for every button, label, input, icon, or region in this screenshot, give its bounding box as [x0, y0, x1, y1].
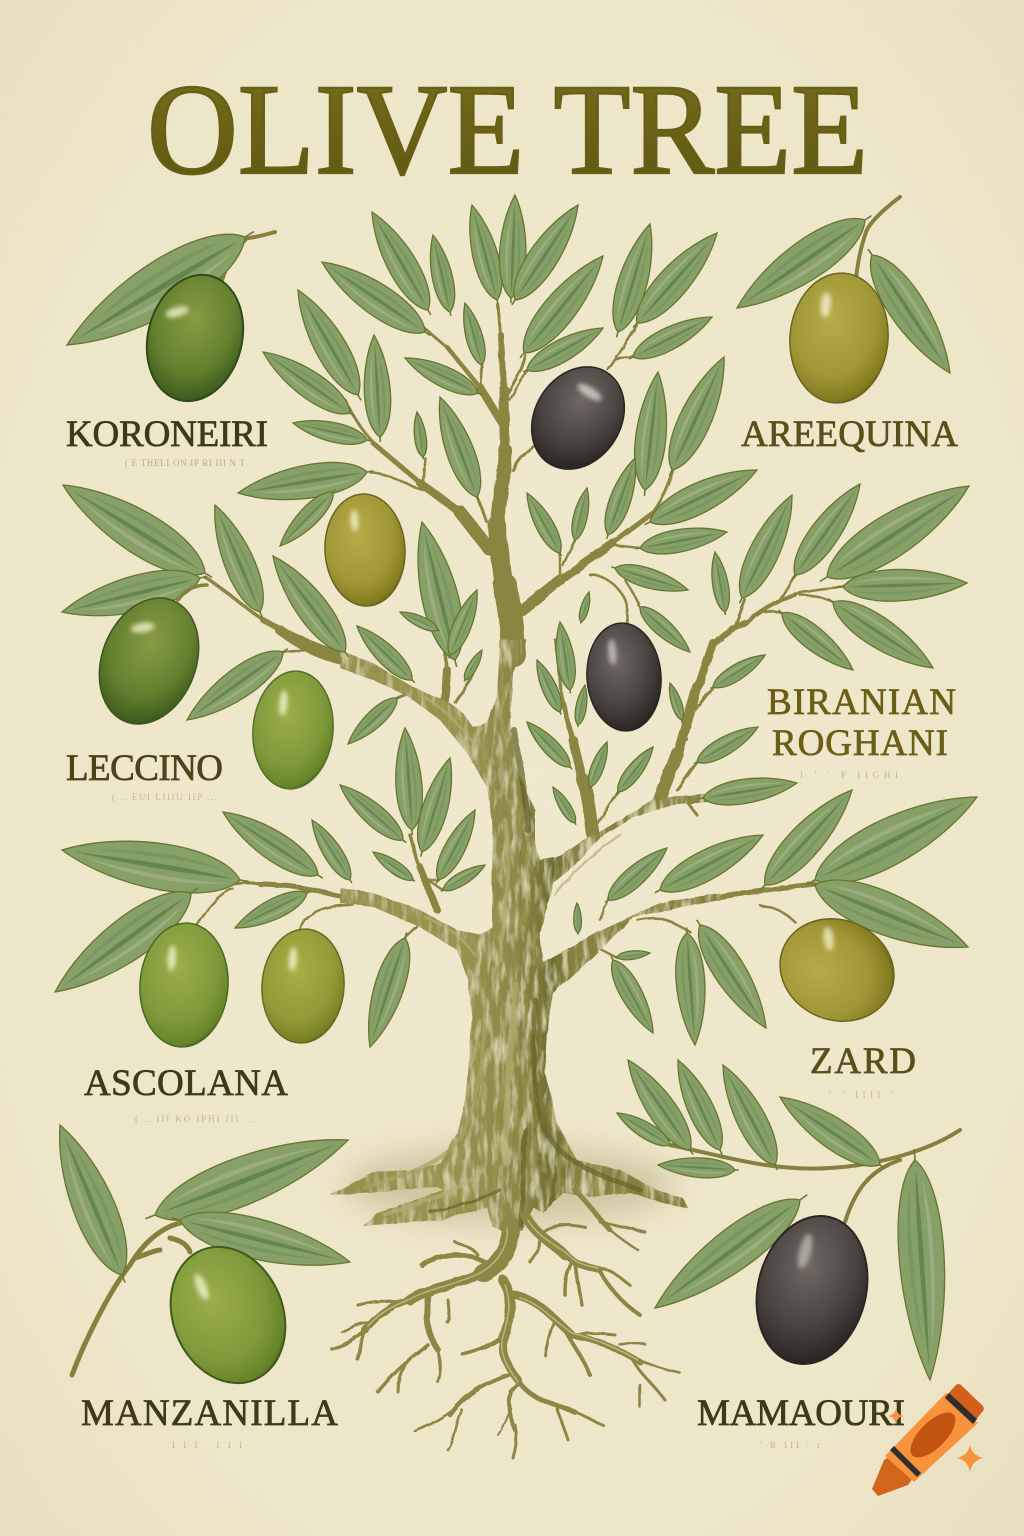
olive: middle green: [248, 668, 338, 792]
leaves: upper left: [235, 282, 492, 553]
areequina olive: [785, 269, 893, 407]
root highlights: [368, 1220, 638, 1382]
olive: right dark: [583, 621, 665, 733]
mamaouri label: MAMAOURI: [697, 1393, 905, 1434]
biranian label: [767, 682, 956, 764]
panel: Manzanilla: [41, 1117, 357, 1450]
olive tree: [42, 194, 988, 1458]
areequina label: AREEQUINA: [741, 414, 958, 455]
panel: Areequina: [726, 197, 965, 455]
mamaouri olive: [741, 1204, 883, 1376]
leaves: top crown: [313, 194, 728, 404]
sparkle small: [888, 1408, 904, 1424]
koroneiri olive: [134, 265, 256, 411]
ground shadow under tree: [345, 1147, 675, 1223]
biranian label: ROGHANI: [772, 723, 948, 764]
second ascolana olive: [258, 926, 348, 1046]
leaves: lower right: [573, 776, 988, 1046]
manzanilla sprig: [41, 1117, 357, 1375]
panel: Zard: [764, 902, 916, 1100]
underground roots: [332, 1190, 680, 1458]
title: OLIVE TREE: [147, 58, 868, 202]
zard label: ZARD: [810, 1041, 916, 1082]
biranian caption: I ' ' P IIGHI: [800, 770, 898, 780]
koroneiri caption: ( E THELI ON IP RI III N T: [125, 458, 246, 468]
panel: Mamaouri: [613, 1052, 960, 1450]
panel: Leccino: [66, 583, 223, 802]
bark lines: [365, 697, 640, 1225]
zard caption: " ' IIII ': [828, 1090, 893, 1100]
leaves: upper right: [519, 350, 764, 658]
ascolana label: ASCOLANA: [84, 1063, 288, 1104]
leaves: centre sprig: [521, 591, 659, 828]
leccino olive: [82, 583, 216, 739]
ascolana caption: ( .. III KO IPHI III ...: [135, 1114, 255, 1124]
leaves: lower left: [42, 727, 488, 1051]
manzanilla caption: III III: [172, 1440, 242, 1450]
ascolana olive: [136, 920, 232, 1050]
olive: top dark: [513, 349, 643, 487]
branches: [197, 305, 845, 958]
icon: crayon watermark: [872, 1384, 984, 1496]
koroneiri sprig: [53, 209, 275, 368]
koroneiri label: KORONEIRI: [66, 414, 268, 455]
mamaouri sprig: [613, 1052, 960, 1382]
manzanilla label: MANZANILLA: [81, 1393, 338, 1434]
panel: Ascolana: [84, 920, 348, 1124]
panel: Koroneiri: [53, 209, 275, 468]
panel: Biranian Roghani: [767, 682, 956, 780]
olive: left yellow: [322, 492, 408, 608]
zard olive: [764, 902, 910, 1038]
biranian label: BIRANIAN: [767, 682, 956, 723]
leccino caption: ( .. EUI LIIIU IIP ...: [112, 792, 217, 802]
mamaouri caption: ' R III ' r: [760, 1440, 820, 1450]
manzanilla olive: [151, 1229, 305, 1401]
trunk and surface roots: [330, 640, 720, 1233]
leccino label: LECCINO: [66, 748, 223, 789]
sparkle large: [956, 1445, 984, 1472]
areequina sprig: [726, 197, 965, 383]
leaves: middle right: [665, 468, 981, 811]
leaves: middle left: [52, 467, 486, 750]
